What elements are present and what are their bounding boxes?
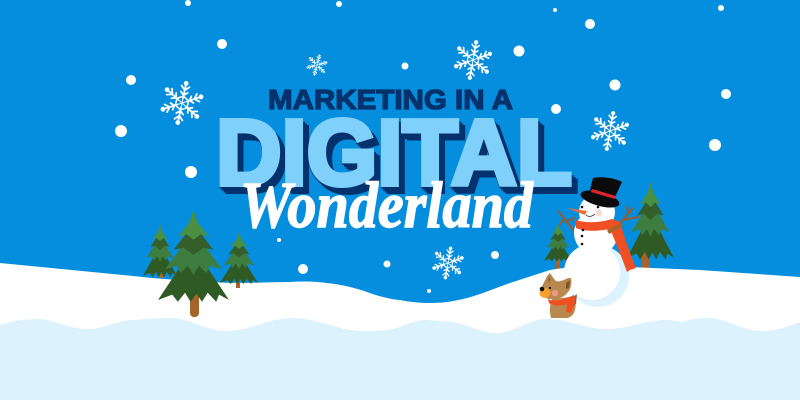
heading: marketing in a: MARKETING IN A [268,84,513,115]
arms [559,207,638,232]
buttons and eyes [581,206,599,245]
trees behind hill, right [544,182,674,270]
snow hill [0,263,800,400]
snowman [559,177,638,307]
body [574,211,618,255]
bottom snowball [567,245,629,307]
nose [567,208,587,215]
heading shadow: digital: DIGITAL [222,108,578,212]
heading: wonderland: Wonderland [240,169,534,242]
falling snow dots [115,0,731,293]
cheek [596,210,602,216]
dog scarf [548,295,575,313]
title [216,84,578,242]
heading shadow: digital: DIGITAL [218,104,574,208]
heading shadow: digital: DIGITAL [220,106,576,210]
scarf [575,219,636,272]
smile [586,214,595,216]
heading shadow: digital: DIGITAL [216,102,572,206]
head [579,194,615,230]
snowflakes [156,37,632,282]
top hat [579,177,622,211]
heading: digital: DIGITAL [216,100,572,204]
trees, left group [143,210,258,317]
dog [540,273,577,318]
foreground snow [0,318,800,400]
